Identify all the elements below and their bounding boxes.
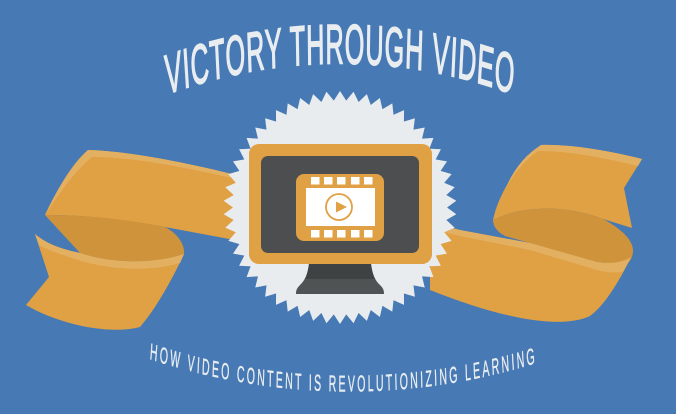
ribbon right: inner fold [493,209,633,265]
ribbon left: upper highlight [45,150,240,215]
ribbon right: lower highlight [440,225,631,272]
monitor screen [261,156,419,253]
ribbon: left [26,150,240,330]
icon: play button [326,194,352,220]
monitor stand upper shade [305,264,375,279]
starburst badge [204,73,468,341]
ribbon left: lower highlight [35,234,184,269]
ribbon left: upper band [45,150,240,241]
title: VICTORY THROUGH VIDEO [163,24,514,93]
ribbon right: upper highlight [505,145,642,190]
ribbon left: inner fold [45,215,184,261]
monitor stand [296,264,384,294]
icon: monitor [249,144,432,294]
ribbon right: upper band [493,145,642,228]
film frame [296,174,384,241]
subtitle: HOW VIDEO CONTENT IS REVOLUTIONIZING LEARNING [150,343,534,392]
monitor frame [249,144,432,264]
ribbon right: lower band [430,222,631,322]
ribbon: right [430,145,642,322]
icon: film strip [296,174,384,241]
film picture area [306,188,375,226]
ribbon left: lower band [26,234,184,330]
film perforations [311,177,372,238]
